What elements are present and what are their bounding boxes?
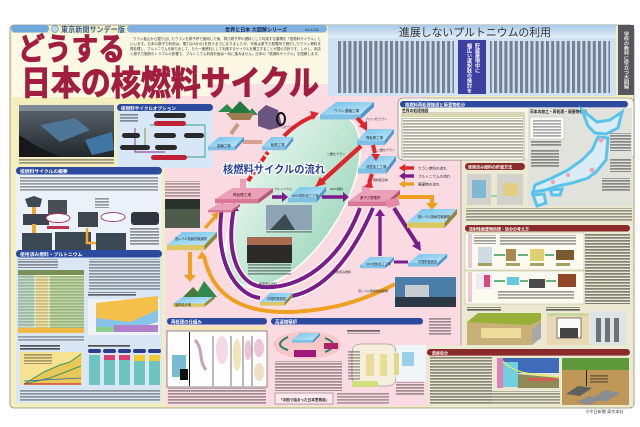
world facilities table bbox=[402, 108, 524, 160]
plant: final disposal bbox=[173, 281, 217, 307]
photo: aerial facility bbox=[19, 105, 114, 164]
overview heading bbox=[16, 167, 162, 175]
waste process rows bbox=[465, 233, 584, 304]
geological disposal diagram bbox=[562, 358, 629, 405]
flow labels: 燃料集合体 bbox=[373, 177, 388, 182]
reprocessing heading: 再処理の仕組み bbox=[171, 318, 202, 325]
icon: mine mountains bbox=[218, 101, 258, 120]
title: どうする bbox=[18, 32, 125, 67]
plant: nuclear power station: 原子力発電所 bbox=[360, 195, 381, 200]
panel: plutonium article bbox=[328, 25, 616, 96]
plant: fuel fabrication: 成型加工工場 bbox=[366, 164, 387, 169]
plutonium chart bbox=[20, 352, 82, 385]
options heading: 核燃料サイクルオプション bbox=[121, 105, 176, 112]
plant: MOX fuel: MOX燃料加工工場 bbox=[292, 193, 319, 198]
plant: fuel fabrication bbox=[358, 151, 396, 174]
intro text: いいます。日本の原子力利用は、電力の3分の1を担うまでになりましたが、今後は原子力発電所で燃やしたウラン燃料を bbox=[130, 41, 321, 46]
newspaper header band bbox=[11, 25, 327, 34]
newspaper header band: 世界と日本 大図解シリーズ bbox=[225, 25, 288, 33]
plant: conversion: 転換工場 bbox=[271, 142, 285, 147]
spent fuel table bbox=[18, 270, 84, 333]
flow labels: 使用済み燃料 bbox=[259, 281, 277, 286]
title: 日本の核燃料サイクル bbox=[21, 65, 319, 103]
plant: refinery: 製錬工場 bbox=[217, 143, 231, 148]
overview heading: 核燃料サイクルの概要 bbox=[20, 168, 68, 175]
low-level disposal section bbox=[467, 307, 541, 345]
heading: radioactive waste: 放射性廃棄物処理・処分の考え方 bbox=[469, 225, 529, 231]
panel: fast breeder reactor bbox=[271, 318, 426, 404]
plant: conversion bbox=[262, 137, 293, 150]
photo: storage pool bbox=[247, 237, 292, 275]
cask diagram bbox=[590, 311, 626, 345]
map of Japan bbox=[528, 108, 632, 206]
world facilities table: 世界の処理施設 bbox=[402, 108, 429, 113]
legend: ウラン燃料の流れ bbox=[418, 166, 447, 170]
plant: final disposal: 最終処分場 bbox=[175, 302, 192, 307]
intro text: 再処理し、プルトニウムを取り出して、もう一度燃料として利用するサイクルを確立することが国の方針です。しかし、相次 bbox=[130, 46, 321, 51]
article subheading box: 貯蔵屋増中に bbox=[474, 42, 480, 73]
plant: interim storage right bbox=[408, 254, 447, 267]
copyright: ©中日新聞 東京本社 bbox=[586, 408, 625, 415]
fast breeder heading bbox=[271, 318, 423, 325]
plant: reconversion bbox=[357, 129, 394, 145]
legend: 廃棄物の流れ bbox=[418, 182, 440, 186]
radioactivity chart bbox=[497, 358, 559, 389]
plant: refinery bbox=[208, 137, 244, 150]
photo: reactor bbox=[395, 277, 456, 307]
flow title: 核燃料サイクルの流れ bbox=[223, 163, 325, 176]
fast breeder heading: 高速増殖炉 bbox=[275, 318, 298, 325]
arrows: waste flow bbox=[184, 197, 438, 312]
plant: interim storage bbox=[260, 293, 293, 306]
plant: interim storage right: 中間貯蔵施設 bbox=[418, 259, 438, 264]
side label: 学校の教材に役立つ大図解 bbox=[623, 30, 629, 90]
spent fuel heading bbox=[16, 250, 162, 258]
flow labels: 二酸化ウラン bbox=[327, 151, 345, 156]
panel: spent fuel and plutonium bbox=[16, 250, 162, 403]
photo: plant exterior bbox=[266, 205, 312, 234]
final disposal heading: 最終処分 bbox=[432, 349, 448, 355]
flow labels bbox=[259, 116, 395, 293]
panel: final disposal bbox=[427, 346, 633, 407]
panel: reprocessing facilities and disposal bbox=[398, 98, 634, 407]
plant: reprocessing bbox=[208, 179, 273, 212]
plant: interim storage: 中間貯蔵施設 bbox=[267, 296, 287, 301]
intro text bbox=[130, 36, 321, 56]
reprocessing diagram bbox=[167, 331, 267, 387]
book note: 「中国で始まった日本軍撤退」 bbox=[279, 397, 329, 402]
flow labels: 高レベル放射性廃棄物 bbox=[358, 288, 388, 293]
panel: fuel cycle overview bbox=[16, 167, 162, 252]
plant: MOX right bbox=[360, 257, 394, 268]
facilities heading bbox=[400, 101, 628, 108]
panel: fuel cycle flow diagram bbox=[165, 91, 438, 312]
arrows: plutonium flow bbox=[217, 192, 421, 298]
plant: enrichment: ウラン濃縮工場 bbox=[334, 108, 360, 113]
article heading: 進展しないプルトニウムの利用 bbox=[399, 26, 551, 39]
flow labels: プルトニウム bbox=[274, 186, 292, 191]
facilities heading: 核燃料再処理施設と廃棄物処分 bbox=[405, 101, 466, 108]
high-level storage section bbox=[546, 307, 589, 345]
title bbox=[18, 32, 319, 103]
plant: low-level waste: 低レベル放射性廃棄物 bbox=[418, 214, 451, 219]
breeder cycle bbox=[273, 331, 341, 359]
green ellipse bbox=[199, 91, 387, 309]
intro text: ウラン鉱山から掘り出したウランを原子炉で使用した後、再び原子炉の燃料として利用する循環を「核燃料サイクル」と bbox=[133, 36, 321, 41]
storage boxes bbox=[467, 174, 523, 205]
plant: nuclear power station bbox=[348, 186, 400, 208]
overview diagram bbox=[22, 196, 159, 251]
newspaper header band: No.1234 bbox=[305, 28, 319, 32]
flow labels: 六フッ化ウラン bbox=[366, 116, 387, 121]
newspaper header band: 東京新聞サンデー版 bbox=[61, 25, 126, 34]
flow labels: MOX燃料 bbox=[330, 186, 343, 191]
arrows: uranium flow bbox=[248, 111, 380, 188]
legend: プルトニウムの流れ bbox=[418, 174, 451, 178]
fuel composition bars bbox=[88, 345, 161, 385]
panel: reprocessing mechanism bbox=[167, 318, 267, 404]
plant: MOX fuel bbox=[288, 187, 326, 202]
final disposal heading bbox=[427, 349, 630, 356]
plant: enrichment bbox=[320, 102, 374, 120]
article subheading box bbox=[458, 40, 486, 94]
heading: radioactive waste bbox=[465, 225, 630, 232]
plant: reprocessing: 再処理工場 bbox=[233, 192, 251, 197]
plant: low-level waste bbox=[407, 209, 457, 228]
plant: MOX right: MOX燃料加工工場 bbox=[366, 261, 391, 266]
heading: spent fuel storage bbox=[465, 163, 525, 170]
plant: reconversion: 再転換工場 bbox=[366, 135, 384, 140]
intro text: ぐ原子力施設のトラブルの影響で、プルトニウム利用計画は一向に進みません。日本の「核燃料サイクル」を図解します。 bbox=[130, 51, 321, 56]
spent fuel heading: 使用済み燃料・プルトニウム bbox=[20, 251, 83, 258]
panel: fuel cycle options bbox=[117, 104, 213, 168]
book note bbox=[275, 393, 333, 404]
photo: storage yard bbox=[165, 181, 200, 228]
flow labels: 六フッ化ウラン bbox=[275, 124, 296, 129]
reactor diagram bbox=[347, 330, 426, 396]
flow labels: 使用済み燃料 bbox=[333, 269, 351, 274]
heading: spent fuel storage: 使用済み燃料の貯蔵方法 bbox=[468, 164, 512, 170]
storage chart bbox=[88, 296, 160, 335]
side label bbox=[618, 25, 634, 95]
flow labels: 二酸化ウラン bbox=[377, 147, 395, 152]
legend bbox=[399, 164, 451, 188]
article subheading box: 幅広い選択肢の検討を bbox=[466, 42, 472, 93]
map of Japan: 日本の加工・再処理・廃棄物処分 bbox=[530, 109, 587, 114]
plant: high-level storage: 高レベル放射性廃棄物 bbox=[175, 236, 208, 241]
icon: uranium ore bbox=[258, 105, 285, 130]
plant: high-level storage bbox=[167, 232, 217, 250]
